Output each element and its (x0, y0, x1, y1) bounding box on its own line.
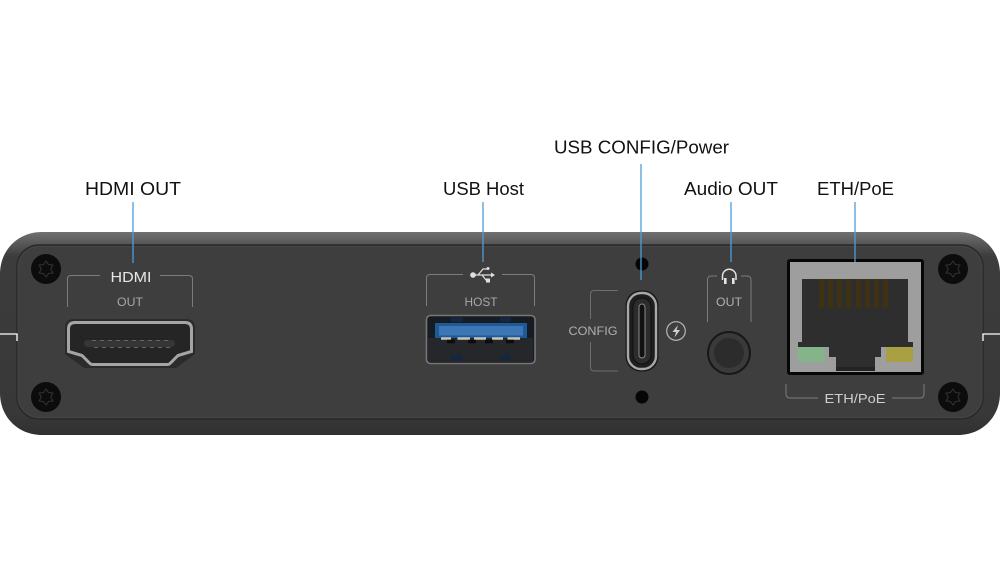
callout: HDMI OUT (85, 179, 181, 263)
audio bracket (708, 276, 751, 322)
panel: USB-C config port (568, 258, 685, 404)
OUT silk label: OUT (716, 295, 743, 309)
hole: top (636, 258, 648, 270)
callout: Audio OUT: Audio OUT (684, 179, 778, 199)
pins (819, 279, 888, 308)
device body (0, 232, 1000, 435)
callout: HDMI OUT: HDMI OUT (85, 179, 181, 199)
callout: USB Host: USB Host (443, 179, 524, 199)
LED: yellow (886, 347, 913, 362)
USB bracket (426, 274, 534, 306)
callout: ETH/PoE (817, 179, 894, 262)
hole: bottom (636, 390, 648, 404)
icon: headphones (722, 269, 736, 284)
USB-A connector (426, 316, 535, 364)
ETH/PoE silk label: ETH/PoE (824, 391, 886, 406)
RJ45 connector (787, 259, 924, 375)
ETH bracket (786, 384, 924, 398)
CONFIG bracket (590, 290, 618, 371)
panel: HDMI port (65, 270, 195, 368)
callout: USB CONFIG/Power: USB CONFIG/Power (554, 138, 729, 158)
icon: screws (31, 254, 968, 412)
OUT silk label: OUT (117, 295, 144, 309)
panel: ethernet port (786, 259, 924, 406)
USB-C connector (626, 290, 658, 372)
HDMI bracket (68, 276, 192, 307)
CONFIG silk label: CONFIG (568, 324, 618, 338)
callout: Audio OUT (684, 179, 778, 262)
HDMI silk label: HDMI (110, 270, 152, 286)
panel: audio jack (707, 269, 751, 375)
callout: ETH/PoE: ETH/PoE (817, 179, 894, 199)
LED: green (798, 347, 825, 362)
HOST silk label: HOST (464, 295, 498, 309)
icon: power bolt (667, 322, 685, 340)
callout: USB Host (443, 179, 524, 262)
audio jack socket (707, 331, 751, 375)
icon: USB trident (470, 267, 495, 282)
HDMI connector (65, 319, 195, 368)
panel: USB Host port (426, 267, 535, 364)
